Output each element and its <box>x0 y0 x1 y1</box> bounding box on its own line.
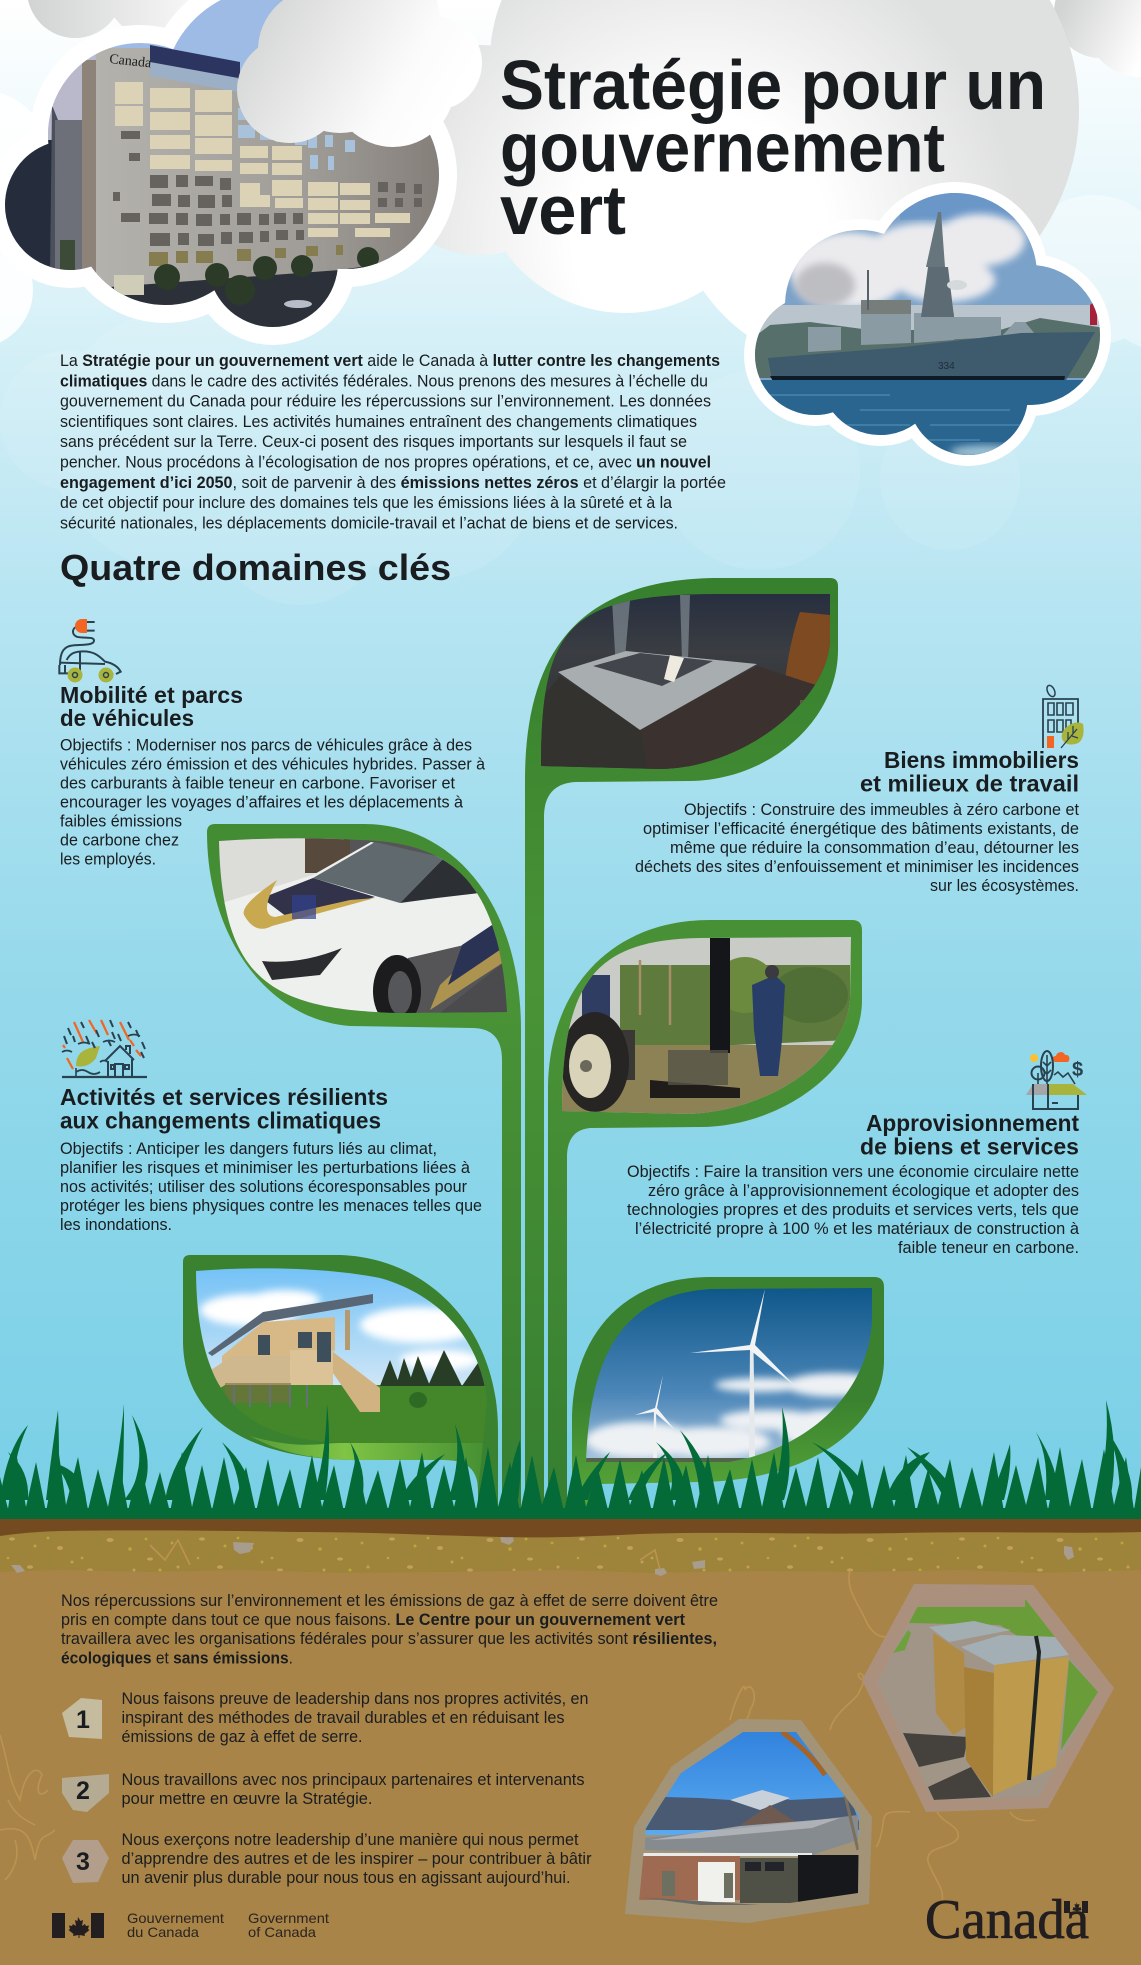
intro paragraph: scientifiques sont claires. Les activités humaines entraînent des changements climatiques <box>60 413 697 431</box>
item 3: d’apprendre des autres et de les inspirer – pour contribuer à bâtir <box>122 1850 592 1868</box>
paragraph: Centre for Greening Government: pris en compte dans tout ce que nous faisons. Le Centre pour un gouvernement vert <box>61 1611 685 1629</box>
section: mobility: les employés. <box>60 850 156 868</box>
intro paragraph: de cet objectif pour inclure des domaines tels que les émissions liées à la sûreté et à la <box>60 494 673 512</box>
sign on building: Canada <box>109 52 153 71</box>
section: climate resilience: Activités et services résilients <box>60 1084 388 1110</box>
leaf frame: wind <box>572 1277 884 1510</box>
section: real property: même que réduire la consommation d’eau, détourner les <box>670 839 1079 857</box>
icon: wheels <box>68 668 114 682</box>
section: mobility: de carbone chez <box>60 831 179 849</box>
leaf highlight: house <box>250 1436 483 1490</box>
section: real property: Biens immobiliers <box>884 747 1079 773</box>
intro paragraph: La Stratégie pour un gouvernement vert aide le Canada à lutter contre les changements <box>60 352 720 370</box>
intro paragraph: climatiques dans le cadre des activités fédérales. Nous prenons des mesures à l’échelle du <box>60 372 708 390</box>
cloud: top left <box>27 0 240 45</box>
intro paragraph: sans précédent sur la Terre. Ceux-ci posent des risques importants sur lesquels il faut se <box>60 433 687 451</box>
icon: Canadian flag <box>52 1913 104 1938</box>
section: mobility: des carburants à faible teneur en carbone. Favoriser et <box>60 774 455 792</box>
paragraph: Centre for Greening Government: Nos répercussions sur l’environnement et les émissions de gaz à effet de serre doivent être <box>61 1592 718 1610</box>
cloud: main title cloud <box>375 0 1079 368</box>
badge 1 <box>62 1698 102 1739</box>
item 2: 2 <box>76 1777 90 1805</box>
icon: plug <box>75 619 87 633</box>
icon: trees, box and dollar: $ <box>1072 1059 1083 1081</box>
intro paragraph: gouvernement du Canada pour réduire les répercussions sur l’environnement. Les données <box>60 393 711 411</box>
plant stems and leaves <box>183 578 884 1510</box>
photo: electric car <box>219 838 507 1013</box>
icon: storm, leaf and house <box>62 1020 147 1077</box>
item 1: inspirant des méthodes de travail durables et en réduisant les <box>122 1709 564 1727</box>
icon: office building with leaf <box>1043 684 1084 748</box>
title: Stratégie pour un <box>500 46 1046 124</box>
section: climate resilience: planifier les risques et minimiser les perturbations liées à <box>60 1159 471 1177</box>
section: procurement: l’électricité propre à 100 % et les matériaux de construction à <box>635 1220 1080 1238</box>
section: climate resilience: nos activités; utiliser des solutions écoresponsables pour <box>60 1178 467 1196</box>
leaf frame: solar <box>525 578 838 1510</box>
cloud: foreground over building <box>237 0 482 147</box>
section: real property: Objectifs : Construire des immeubles à zéro carbone et <box>684 801 1079 819</box>
photo: vineyard and tractor <box>562 937 851 1114</box>
heading: four key areas: Quatre domaines clés <box>60 547 451 588</box>
item 1: Nous faisons preuve de leadership dans nos propres activités, en <box>122 1690 588 1708</box>
windows lit <box>115 82 410 237</box>
ground base <box>0 1520 1141 1965</box>
badge 3 <box>62 1840 109 1883</box>
Government of Canada signature: Gouvernement <box>127 1910 224 1926</box>
section: real property: déchets des sites d’enfouissement et minimiser les incidences <box>635 858 1079 876</box>
Government of Canada signature: of Canada <box>248 1924 316 1940</box>
section: climate resilience: protéger les biens physiques contre les menaces telles que <box>60 1197 482 1215</box>
section: procurement: technologies propres et des produits et services verts, tels que <box>627 1201 1079 1219</box>
photo cloud: navy ship <box>740 180 1120 470</box>
title: vert <box>500 171 626 249</box>
section: climate resilience: aux changements climatiques <box>60 1108 381 1134</box>
title: gouvernement <box>500 108 945 186</box>
item 1: 1 <box>76 1706 90 1734</box>
item 3: un avenir plus durable pour nous tous en agissant aujourd’hui. <box>122 1869 570 1887</box>
icon: electric car <box>59 622 121 674</box>
title <box>500 46 1046 249</box>
section: climate resilience <box>60 1020 482 1234</box>
icon: trees, box and dollar <box>1026 1051 1087 1109</box>
section: mobility: faibles émissions <box>60 812 182 830</box>
intro paragraph: sécurité nationales, les déplacements domicile-travail et l’achat de biens et de services. <box>60 514 678 532</box>
hexagon photo: mountain building <box>625 1719 872 1923</box>
tall grass blades <box>0 1425 28 1500</box>
section: real property: optimiser l’efficacité énergétique des bâtiments existants, de <box>643 820 1079 838</box>
cloud: top right <box>1054 0 1141 77</box>
intro paragraph <box>60 352 726 532</box>
intro paragraph: engagement d’ici 2050, soit de parvenir à des émissions nettes zéros et d’élargir la portée <box>60 474 726 492</box>
faint background clouds <box>0 310 1020 605</box>
section: mobility: Mobilité et parcs <box>60 682 243 708</box>
Government of Canada signature: Government <box>248 1910 329 1926</box>
grass <box>0 1400 1141 1519</box>
photo: wind turbines <box>580 1285 885 1465</box>
cloud: behind ship <box>1019 195 1141 350</box>
hexagon photo: beehives <box>862 1584 1114 1812</box>
section: mobility: véhicules zéro émission et des véhicules hybrides. Passer à <box>60 755 486 773</box>
section: mobility: encourager les voyages d’affaires et les déplacements à <box>60 793 464 811</box>
topsoil band <box>0 1518 1141 1537</box>
section: procurement: Approvisionnement <box>866 1110 1079 1136</box>
badge 2 <box>62 1774 109 1812</box>
photo cloud: navy ship: 334 <box>938 361 955 372</box>
item 2 <box>62 1771 584 1812</box>
item 3: 3 <box>76 1848 90 1876</box>
section: climate resilience: les inondations. <box>60 1216 172 1234</box>
section: mobility: de véhicules <box>60 705 194 731</box>
item 3: Nous exerçons notre leadership d’une manière qui nous permet <box>122 1831 579 1849</box>
intro paragraph: pencher. Nous procédons à l’écologisation de nos propres opérations, et ce, avec un nouvel <box>60 454 711 472</box>
ship superstructure <box>808 313 1034 352</box>
photo: wooden house <box>190 1262 490 1450</box>
item 3 <box>62 1831 592 1887</box>
roots <box>0 1540 1035 1900</box>
section: mobility: Objectifs : Moderniser nos parcs de véhicules grâce à des <box>60 736 472 754</box>
Government of Canada signature: du Canada <box>127 1924 199 1940</box>
soil speckled layer <box>0 1530 1141 1576</box>
photo cloud: office building <box>0 0 480 345</box>
section: procurement: de biens et services <box>860 1134 1079 1160</box>
photo: solar roof building <box>541 594 830 769</box>
wordmark flag <box>1064 1901 1088 1913</box>
section: real property: sur les écosystèmes. <box>930 877 1079 895</box>
leaf frame: house <box>183 1255 498 1510</box>
paragraph: Centre for Greening Government: écologiques et sans émissions. <box>61 1650 293 1668</box>
section: procurement: faible teneur en carbone. <box>898 1239 1079 1257</box>
paragraph: Centre for Greening Government <box>61 1592 718 1668</box>
section: procurement <box>627 1051 1087 1257</box>
item 2: pour mettre en œuvre la Stratégie. <box>122 1790 372 1808</box>
section: mobility <box>59 619 486 868</box>
item 1: émissions de gaz à effet de serre. <box>122 1728 362 1746</box>
Government of Canada signature <box>52 1910 329 1940</box>
item 2: Nous travaillons avec nos principaux partenaires et intervenants <box>122 1771 584 1789</box>
item 1 <box>62 1690 588 1746</box>
leaf frame: vineyard <box>548 920 862 1510</box>
section: procurement: Objectifs : Faire la transition vers une économie circulaire nette <box>627 1163 1079 1181</box>
leaf frame: vehicle <box>207 824 521 1510</box>
paragraph: Centre for Greening Government: travaillera avec les organisations fédérales pour s’assurer que les activités sont résilientes, <box>61 1630 717 1648</box>
Canada wordmark: Canada <box>925 1889 1089 1951</box>
section: procurement: zéro grâce à l’approvisionnement écologique et adopter des <box>648 1182 1079 1200</box>
section: real property: et milieux de travail <box>860 770 1079 796</box>
section: climate resilience: Objectifs : Anticiper les dangers futurs liés au climat, <box>60 1140 437 1158</box>
section: real property <box>635 684 1084 895</box>
cloud: left edge <box>0 90 50 348</box>
